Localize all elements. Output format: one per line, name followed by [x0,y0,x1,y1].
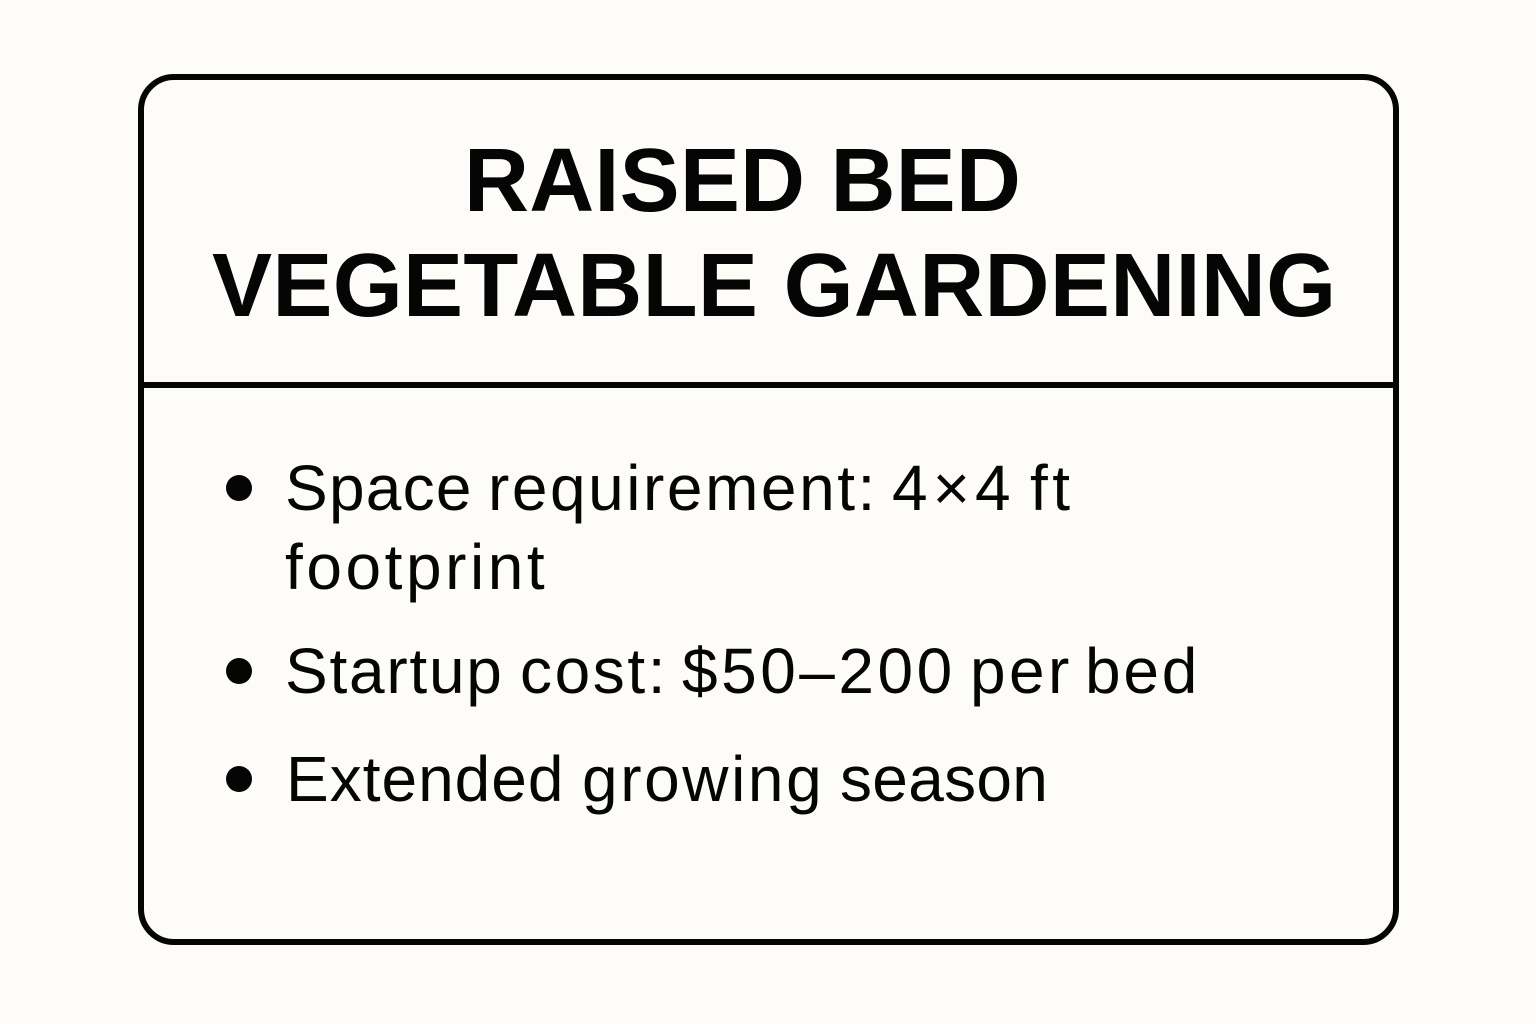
divider line [141,382,1396,388]
bullet list [226,452,1200,815]
panel: card [138,74,1399,945]
title [212,131,1336,336]
bullet 2 text: bed [1085,635,1200,707]
bullet 1 text line 1: requirement: [488,452,878,524]
bullet 3 text [286,743,1048,815]
bullet 1 text line 1: Space [285,452,473,524]
bullet 3 text: growing [582,743,824,815]
bullet 2 text: cost: [520,635,668,707]
bullet 3 text: season [840,743,1048,815]
bullet 1 text line 1: ft [1030,452,1075,524]
bullet 1 text line 1: 4×4 [892,452,1016,524]
bullet 3 marker [226,766,252,792]
bullet 1 text line 1 [285,452,1075,524]
bullet 2 marker [226,658,252,684]
bullet 3 text: Extended [286,743,564,815]
bullet 1 marker [226,475,252,501]
title line 2: VEGETABLE GARDENING [212,236,1336,336]
bullet 1 text line 2: footprint [285,531,548,603]
bullet 2 text [285,635,1200,707]
bullet 2 text: $50–200 [682,635,956,707]
bullet 2 text: Startup [285,635,504,707]
title line 1: RAISED BED [464,131,1021,231]
bullet 2 text: per [970,635,1073,707]
